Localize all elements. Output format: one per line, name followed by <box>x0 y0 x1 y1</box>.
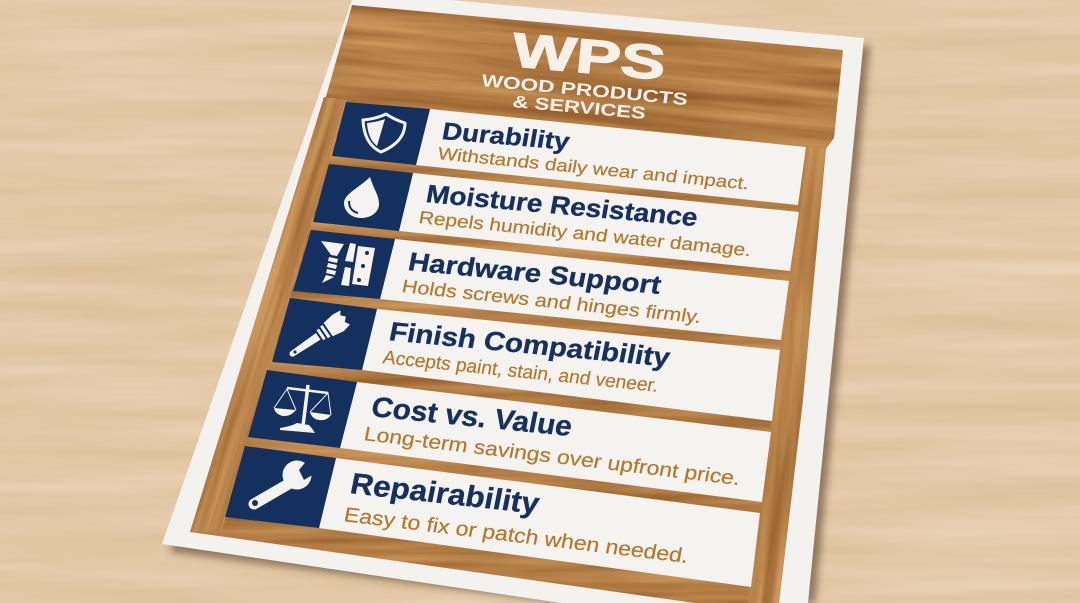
row 3 navy block <box>293 230 395 299</box>
row 1 title: Durability <box>440 118 572 156</box>
wood panel and frame <box>180 0 850 603</box>
icon: wrench <box>252 459 319 506</box>
row 5 description: Long-term savings over upfront price. <box>362 423 742 490</box>
row 1 description: Withstands daily wear and impact. <box>436 143 751 193</box>
company name line 2: & SERVICES <box>512 92 647 123</box>
row 6 navy block <box>225 446 336 528</box>
row 2 navy block <box>313 164 413 231</box>
row 6 white panel <box>319 458 760 587</box>
row 4 navy block <box>272 298 377 370</box>
icon: screw <box>321 241 344 283</box>
row 1: Durability <box>332 102 806 205</box>
row 4 title: Finish Compatibility <box>387 316 673 373</box>
logo wordmark: WPS <box>510 23 668 91</box>
row 5 navy block <box>248 370 357 448</box>
row 5 white panel <box>340 382 771 502</box>
row 4 description: Accepts paint, stain, and veneer. <box>381 346 660 396</box>
icon: balance scale <box>274 385 331 433</box>
icon: shield <box>363 114 405 152</box>
icon: water drop <box>344 177 379 218</box>
row 5 title: Cost vs. Value <box>369 391 575 443</box>
row 2 white panel <box>399 173 799 271</box>
row 1 navy block <box>332 102 430 165</box>
row 6 description: Easy to fix or patch when needed. <box>342 504 690 568</box>
row 1 white panel <box>416 109 806 205</box>
paper shadow <box>170 8 870 603</box>
row 4 white panel <box>362 309 780 421</box>
row 3 description: Holds screws and hinges firmly. <box>400 276 703 327</box>
row 6 title: Repairability <box>348 467 543 521</box>
row 2 description: Repels humidity and water damage. <box>417 207 753 260</box>
row 3 white panel <box>380 239 789 340</box>
row 2 title: Moisture Resistance <box>424 180 700 232</box>
paper sheet <box>162 0 864 603</box>
row 4: Finish Compatibility <box>272 298 780 421</box>
row 5: Cost vs. Value <box>248 370 771 502</box>
row 3 title: Hardware Support <box>406 248 664 300</box>
row 6: Repairability <box>225 446 760 587</box>
icon: hinge <box>341 243 375 286</box>
icon: paint brush <box>284 309 352 364</box>
row 3: Hardware Support <box>293 230 789 340</box>
logo: WPS with company name <box>481 23 689 123</box>
row 2: Moisture Resistance <box>313 164 799 271</box>
company name line 1: WOOD PRODUCTS <box>481 71 689 109</box>
